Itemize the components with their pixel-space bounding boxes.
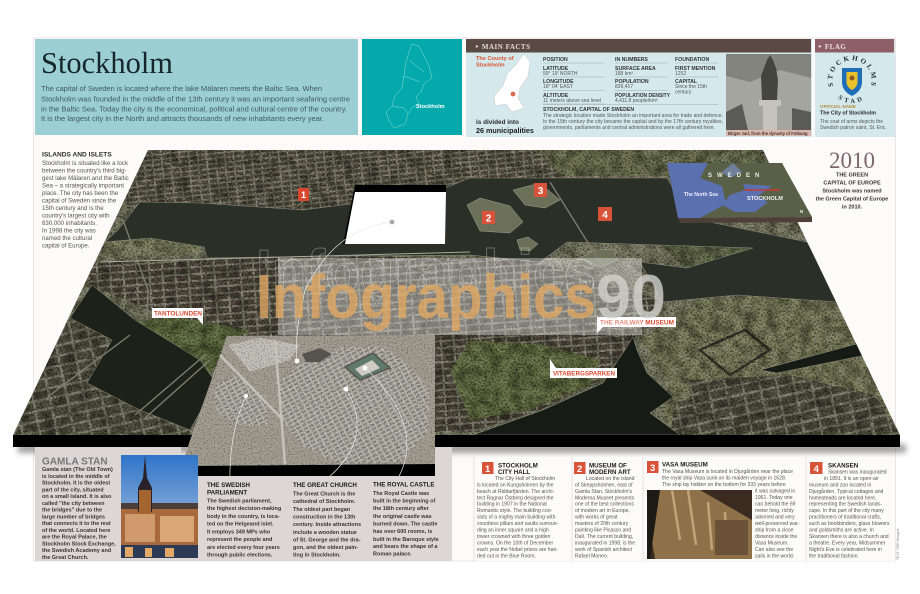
facts: position: 11 meters above sea level	[543, 98, 601, 104]
callout: 2010 green capital: in 2010.	[842, 204, 863, 210]
number marker 4: Skansen: 4	[602, 210, 608, 221]
text: the Swedish Parliament: PARLIAMENT	[207, 490, 247, 496]
text: Gamla Stan description: on a small island. It is also	[42, 494, 112, 500]
attraction 4: Skansen: Djurgården. Typical cottages and	[809, 488, 884, 495]
facts: position: POSITION	[543, 57, 568, 63]
text: Gamla Stan description: the bridges" due to the	[42, 508, 102, 514]
text: Gamla Stan description	[42, 467, 116, 561]
facts: foundation: CAPITAL	[675, 79, 698, 85]
label: Stockholm: Stockholm	[416, 104, 445, 110]
attraction 2: Museum of Modern Art: Dalí. The current building,	[575, 534, 633, 540]
island: Skeppsholmen	[467, 183, 617, 267]
callout: 2010 green capital	[816, 148, 888, 210]
attraction 3: Vasa Museum: Can also see the	[755, 547, 793, 553]
text: the Swedish Parliament: It employs 349 MPs who	[207, 530, 271, 536]
attraction 4: Skansen: museum and zoo located in	[809, 482, 871, 488]
royal palace	[345, 353, 390, 380]
heading: Stockholm: Stockholm	[41, 45, 173, 80]
text: the Great Church: construction in the 13th	[293, 514, 356, 520]
label: The Railway Museum: THE RAILWAY MUSEUM	[600, 320, 674, 327]
attraction 3: Vasa Museum: sails in the world.	[755, 554, 794, 560]
text: the Great Church: The oldest part began	[293, 507, 351, 513]
facts: foundation: FIRST MENTION	[675, 66, 716, 72]
attraction 3: Vasa Museum: Vasa Museum.	[755, 540, 789, 546]
text: the Royal Castle: the 18th century after	[373, 506, 430, 512]
text: islands and islets: capital of Europe.	[42, 242, 90, 250]
text: Gamla Stan description: is located in the middle of	[42, 474, 110, 480]
attraction 3: Vasa Museum: The Vasa Museum is located in Djurgården near the place	[662, 468, 793, 475]
facts: foundation: 1252	[675, 71, 686, 77]
attraction 4: Skansen: Skansen was inaugurated	[828, 470, 887, 476]
number marker 3: Vasa Museum	[534, 183, 547, 197]
attraction 1: Stockholm City Hall: building in 1907 in the National	[477, 502, 547, 508]
text: the Swedish Parliament: represent the people and	[207, 537, 272, 543]
attraction 1: Stockholm City Hall: countless pillars and vaults surroun-	[477, 521, 559, 527]
text: islands and islets: ISLANDS AND ISLETS	[42, 152, 112, 158]
text: Gamla Stan description: called "the city between	[42, 501, 105, 507]
map base side	[13, 435, 900, 447]
text: the Royal Castle: burned down. The castle	[373, 522, 437, 528]
heading: flag: ‣ FLAG	[818, 43, 846, 51]
facts: position	[543, 57, 605, 104]
attraction 1: Stockholm City Hall: 1	[485, 464, 491, 475]
old-town street blocks	[275, 347, 430, 464]
facts: position: 59° 19' NORTH	[543, 71, 578, 77]
attraction 4: Skansen: 4	[814, 464, 820, 475]
photo: statue of Birger Jarl: Birger Jarl, from the dynasty of Folkung	[728, 131, 808, 136]
inset map: Sweden region	[667, 163, 812, 223]
attraction 3: Vasa Museum: can behold the 69	[755, 502, 796, 508]
attraction 4: Skansen: cape. In this part of the city many	[809, 508, 884, 514]
text: Gamla Stan description: Gamla stan (The Old Town)	[42, 467, 113, 473]
attraction 4: Skansen: SKANSEN	[828, 462, 859, 470]
label: The Railway Museum	[597, 317, 676, 333]
watermark	[256, 238, 666, 335]
attraction 1: Stockholm City Hall: tower crowned with three golden	[477, 534, 551, 540]
text: the Swedish Parliament: through public elections.	[207, 552, 273, 558]
watermark: Infographics	[256, 238, 596, 307]
text: official name: The coat of arms depicts the	[820, 119, 883, 125]
text: the Royal Castle: Roman palace.	[373, 552, 412, 558]
text: islands and islets: country's largest city with	[42, 212, 110, 220]
facts: foundation: Since the 15th	[675, 84, 707, 90]
attraction 4: Skansen: practitioners of traditional crafts,	[809, 514, 881, 520]
photo: Vasa ship	[647, 490, 752, 559]
attraction 3: Vasa Museum: meter long, richly	[755, 508, 794, 514]
attraction 3: Vasa Museum: well-preserved war-	[755, 521, 800, 527]
county map: The County of	[476, 56, 514, 62]
attraction 4: Skansen: the traditional fashion.	[809, 554, 859, 560]
attraction 4: Skansen: homesteads are located here,	[809, 496, 876, 502]
attraction 3: Vasa Museum: The ship lay hidden on the bottom for 333 years before	[662, 482, 786, 488]
attraction 2: Museum of Modern Art: of modern art in Europe,	[575, 508, 630, 514]
attraction 3: Vasa Museum: the royal ship Vasa sunk on its maiden voyage in 1628.	[662, 476, 786, 482]
attraction 3: Vasa Museum: 3	[650, 463, 655, 474]
attraction 1: Stockholm City Hall: ded out in the Blue Room.	[477, 554, 536, 560]
facts: position: ALTITUDE	[543, 93, 569, 99]
intro text: Stockholm was founded in the middle of the 13th century it was an important seafaring centre	[41, 96, 350, 104]
Riddarholmen and Helgeandsholmen	[214, 375, 268, 425]
panel: locator map of Sweden	[362, 39, 462, 135]
text: Gamla Stan description: part of the city, situated	[42, 487, 104, 493]
intro text: The capital of Sweden is located where the lake Mälaren meets the Baltic Sea. When	[41, 86, 322, 93]
text: the Royal Castle: has over 600 rooms, is	[373, 529, 432, 535]
intro text: It is the largest city in the North and attracts thousands of new inhabitants every year.	[41, 116, 324, 123]
text: Stockholm, capital of Sweden: In the 15th century the city became the capital and by the 17th century royalties,	[543, 119, 723, 125]
callout: 2010 green capital: Stockholm was named	[822, 188, 882, 194]
text: Stockholm, capital of Sweden: The strategic location made Stockholm an important area for trade and defence.	[543, 113, 723, 119]
text: official name: Swedish patron saint, St. Eric.	[820, 125, 887, 131]
photo: Riddarholmen church at dusk	[121, 455, 198, 558]
attraction 1: Stockholm City Hall: crowns. On the 10th of December	[477, 540, 553, 546]
text: the Great Church: cathedral of Stockholm.	[293, 499, 356, 505]
facts: foundation: FOUNDATION	[675, 57, 709, 63]
county map: is divided into	[476, 119, 519, 126]
urban north: Kungsholmen and Norrmalm	[100, 150, 780, 210]
county map	[476, 54, 534, 135]
attraction 2: Museum of Modern Art: painting like Picasso and	[575, 528, 631, 534]
facts: in numbers	[615, 57, 671, 104]
attraction 1: Stockholm City Hall: is located on Kungsholmen by the	[477, 482, 554, 488]
heading: Gamla Stan: GAMLA STAN	[42, 456, 108, 468]
attraction 4: Skansen: in 1891. It is an open-air	[824, 476, 879, 482]
aerial map of Stockholm	[0, 150, 920, 435]
inset map: Sweden region: N	[800, 209, 803, 214]
attraction 3: Vasa Museum: distance inside the	[755, 534, 797, 540]
text: islands and islets: capital of Sweden since the	[42, 198, 117, 204]
text: the Great Church: include a wooden statue	[293, 530, 357, 536]
icon: Stockholm coat of arms	[828, 55, 876, 104]
watermark: 90	[596, 263, 666, 332]
urban south: Södermalm	[90, 256, 660, 435]
text: Gamla Stan description: Stockholm. It is the oldest	[42, 481, 110, 487]
icon: Stockholm coat of arms: STAD	[838, 95, 862, 104]
text: Stockholm, capital of Sweden	[543, 104, 723, 131]
text: the Great Church: ting in Stockholm.	[293, 552, 341, 558]
facts: in numbers: 188 km²	[615, 71, 633, 77]
number marker 1: City Hall: 1	[301, 190, 307, 201]
attraction 1: Stockholm City Hall: sists of a mighty main building with	[477, 514, 556, 520]
attraction 1: Stockholm City Hall	[477, 462, 559, 560]
attraction 1: Stockholm City Hall: each year the Nobel prizes are han-	[477, 547, 558, 553]
attraction 4: Skansen: Night's Eve is celebrated here in	[809, 547, 882, 553]
text: Gamla Stan description: of the world. Located here	[42, 528, 110, 534]
attraction 2: Museum of Modern Art: Rafael Moneo.	[575, 554, 608, 560]
attraction 2: Museum of Modern Art: Moderna Museet presents	[575, 496, 635, 502]
label: Tantolunden	[152, 308, 203, 325]
text: Stockholm, capital of Sweden: STOCKHOLM, CAPITAL OF SWEDEN	[543, 107, 634, 113]
attraction 1: Stockholm City Hall: CITY HALL	[498, 469, 530, 476]
text: the Great Church: gon, and the oldest pain-	[293, 545, 358, 551]
facts: foundation	[675, 57, 718, 96]
urban south-west: Hornstull	[15, 300, 190, 435]
facts: foundation: century	[675, 90, 692, 96]
icon: Stockholm coat of arms: STOCKHOLMS	[828, 55, 876, 86]
attraction 2: Museum of Modern Art	[574, 462, 635, 560]
text: official name	[820, 104, 887, 131]
callout: 2010 green capital: THE GREEN	[836, 172, 868, 178]
callout: 2010 green capital: CAPITAL OF EUROPE	[823, 180, 881, 186]
inset map: Sweden region: STOCKHOLM	[747, 196, 783, 202]
heading: main facts: ‣ MAIN FACTS	[475, 43, 530, 51]
text: Gamla Stan description: that connects it to the rest	[42, 521, 111, 527]
facts: position: LONGITUDE	[543, 79, 574, 85]
text: the Royal Castle: and bears the shape of a	[373, 544, 438, 550]
text: the Swedish Parliament: ted on the Helgeand islet.	[207, 522, 274, 528]
facts: position: LATITUDE	[543, 66, 569, 72]
text: the Royal Castle: the original castle was	[373, 514, 432, 520]
facts: position: 18° 04' EAST	[543, 84, 573, 90]
attraction 1: Stockholm City Hall: The City Hall of Stockholm	[495, 476, 555, 482]
text: islands and islets: 15th century and is the	[42, 205, 104, 212]
attraction 1: Stockholm City Hall: STOCKHOLM	[498, 462, 538, 470]
attraction 3: Vasa Museum	[647, 461, 800, 560]
facts: in numbers: IN NUMBERS	[615, 57, 648, 63]
intro text: in the Baltic Sea. Today the city is the economical, political and cultural centre of the country.	[41, 106, 347, 114]
facts: in numbers: 4,411.8 people/km²	[615, 98, 658, 104]
text: the Great Church: of St. George and the dra-	[293, 538, 361, 544]
water	[70, 178, 866, 435]
text: islands and islets: gest lake Mälaren and the Baltic	[42, 175, 129, 182]
southeast area: Hammarby	[642, 296, 895, 425]
text: the Royal Castle: The Royal Castle was	[373, 491, 429, 497]
panel: title and introduction	[35, 39, 358, 135]
text: islands and islets: Stockholm is situated like a lock	[42, 160, 129, 167]
attraction 2: Museum of Modern Art: MODERN ART	[589, 469, 631, 476]
text: the Great Church	[293, 482, 361, 558]
watermark: Infographics	[256, 263, 596, 332]
text: islands and islets: In 1998 the city was	[42, 228, 96, 234]
text: islands and islets: named the cultural	[42, 235, 92, 242]
text: the Swedish Parliament: are elected every four years	[207, 545, 280, 551]
attraction 3: Vasa Museum: it was salvaged in	[755, 488, 795, 494]
text: islands and islets	[42, 152, 129, 250]
attraction 2: Museum of Modern Art: Gamla Stan, Stockholm's	[575, 489, 632, 495]
label: Vitabergsparken: VITABERGSPARKEN	[553, 370, 615, 378]
text: the Great Church: century. Inside attractions	[293, 522, 361, 528]
number marker 2: Museum of Modern Art	[482, 211, 495, 224]
attraction 2: Museum of Modern Art: masters of 20th century	[575, 521, 629, 527]
callout: 2010 green capital: the Green Capital of Europe	[816, 196, 888, 202]
text: Gamla Stan description: are the Royal Palace, the	[42, 535, 107, 541]
park: Vitabergsparken	[450, 340, 600, 420]
icon: Sweden outline	[386, 44, 432, 128]
label: Vitabergsparken	[550, 359, 617, 378]
photo: statue of Birger Jarl	[726, 54, 811, 136]
label: Tantolunden: TANTOLUNDEN	[154, 310, 202, 318]
text: islands and islets: between the country's third big-	[42, 168, 126, 174]
text: islands and islets: place. The city has been the	[42, 190, 119, 197]
attraction 4: Skansen: a theatre. Every year, Midsummer	[809, 540, 886, 546]
callout: 2010 green capital: 2010	[829, 148, 875, 173]
attraction 2: Museum of Modern Art: inaugurated in 1998, is the	[575, 540, 635, 546]
text: islands and islets: Sea – a strategically important	[42, 182, 124, 190]
intro text	[41, 86, 350, 123]
attraction 3: Vasa Museum: 1961. Today one	[755, 495, 793, 501]
panel: flag	[815, 39, 895, 137]
county map: Stockholm	[476, 62, 505, 68]
parliament building	[302, 348, 332, 362]
county map: 26 municipalities	[476, 126, 534, 135]
credit: TEXT: PER Designs	[896, 528, 900, 560]
number marker 4: Skansen	[598, 207, 612, 221]
attraction 4: Skansen: and goldsmiths are active. In	[809, 528, 874, 534]
facts: in numbers: 829,417	[615, 84, 633, 90]
text: the Swedish Parliament: THE SWEDISH	[207, 482, 251, 489]
city-block cutout	[343, 185, 446, 244]
text: the Royal Castle	[373, 482, 439, 558]
text: the Swedish Parliament	[207, 482, 281, 558]
text: Stockholm, capital of Sweden: governments, parliaments and central administrations were all gathered here.	[543, 125, 715, 131]
panel: Gamla Stan	[35, 447, 452, 561]
number marker 2: Museum of Modern Art: 2	[486, 214, 492, 224]
inset: Gamla Stan close-up	[180, 335, 435, 476]
text: official name: The City of Stockholm	[820, 110, 876, 116]
attraction 1: Stockholm City Hall: ding an inner square and a high	[477, 528, 549, 534]
panel: attractions	[474, 457, 895, 561]
attraction 3: Vasa Museum: adorned and very	[755, 514, 795, 520]
attraction 2: Museum of Modern Art: Located on the island	[586, 476, 635, 482]
text: Gamla Stan description: the Great Church.	[42, 555, 89, 561]
map pointers	[230, 222, 407, 484]
text: Gamla Stan description: Stockholm Stock Exchange,	[42, 542, 116, 548]
attraction 2: Museum of Modern Art: with works of great	[575, 514, 618, 520]
facts: in numbers: SURFACE AREA	[615, 66, 656, 72]
attraction 4: Skansen: such as bookbinders, glass blowers	[809, 521, 890, 527]
text: the Royal Castle: built in the Baroque style	[373, 537, 439, 543]
attraction 3: Vasa Museum: ship from a close	[755, 528, 794, 534]
inset map: Sweden region: SWEDEN	[708, 173, 764, 179]
attraction 4: Skansen: representing the Swedish lands-	[809, 502, 882, 508]
park: Tantolunden	[140, 318, 250, 374]
attraction 1: Stockholm City Hall: Romantic style. The building con-	[477, 508, 553, 514]
panel: main facts	[466, 39, 812, 137]
text: the Royal Castle: built in the beginning of	[373, 498, 435, 504]
text: the Swedish Parliament: The Swedish parliament,	[207, 498, 272, 504]
attraction 1: Stockholm City Hall: tect Ragnar Östberg designed the	[477, 494, 554, 502]
text: the Swedish Parliament: body in the country, is loca-	[207, 514, 280, 520]
attraction 2: Museum of Modern Art: work of Spanish architect	[575, 547, 632, 553]
number marker 3: Vasa Museum: 3	[538, 186, 544, 197]
attraction 2: Museum of Modern Art: 2	[577, 464, 582, 475]
number marker 1: City Hall	[298, 188, 309, 201]
facts: in numbers: POPULATION DENSITY	[615, 93, 671, 99]
text: Gamla Stan description: large number of bridges	[42, 514, 105, 520]
forest area: Djurgården	[660, 245, 751, 268]
facts: in numbers: POPULATION	[615, 79, 649, 85]
attraction 4: Skansen	[809, 462, 890, 560]
text: islands and islets: 830,000 inhabitants.	[42, 220, 97, 227]
attraction 4: Skansen: Skansen there is also a church and	[809, 534, 889, 540]
attraction 2: Museum of Modern Art: MUSEUM OF	[589, 462, 627, 470]
pointer dots	[244, 220, 394, 398]
attraction 2: Museum of Modern Art: of Skeppsholmen, east of	[575, 482, 633, 488]
attraction 3: Vasa Museum: VASA MUSEUM	[662, 462, 708, 468]
text: official name: OFFICIAL NAME	[820, 104, 856, 109]
text: the Swedish Parliament: the highest decision-making	[207, 506, 281, 512]
shadow under map	[18, 444, 906, 453]
attraction 1: Stockholm City Hall: beach at Riddarfjärden. The archi-	[477, 489, 555, 495]
inset map: Sweden region: The North Sea	[684, 192, 718, 198]
text: the Great Church: The Great Church is the	[293, 492, 355, 498]
text: the Royal Castle: THE ROYAL CASTLE	[373, 482, 435, 488]
bridges	[50, 182, 600, 418]
island: Långholmen	[199, 250, 200, 251]
text: Gamla Stan description: the Swedish Academy and	[42, 548, 111, 554]
text: the Great Church: THE GREAT CHURCH	[293, 482, 357, 489]
attraction 2: Museum of Modern Art: one of the best collections	[575, 502, 634, 508]
